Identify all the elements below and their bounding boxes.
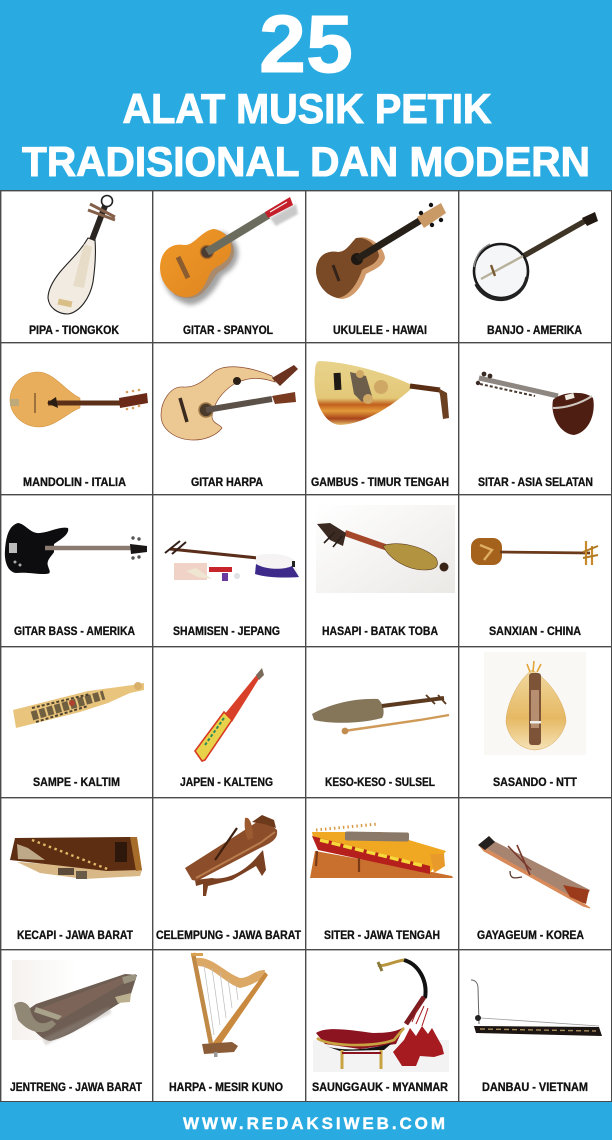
panel: kecapi bbox=[1, 798, 153, 950]
icon: sasando bbox=[484, 652, 586, 755]
panel: banjo bbox=[459, 191, 612, 343]
label: DANBAU - VIETNAM bbox=[482, 1082, 588, 1094]
label: HASAPI - BATAK TOBA bbox=[322, 626, 438, 638]
panel: danbau bbox=[459, 950, 612, 1102]
panel: pipa bbox=[1, 191, 153, 343]
label: MANDOLIN - ITALIA bbox=[23, 477, 126, 489]
panel: sampe bbox=[1, 647, 153, 798]
label: KESO-KESO - SULSEL bbox=[325, 777, 435, 789]
label: JENTRENG - JAWA BARAT bbox=[10, 1082, 142, 1094]
panel: hasapi bbox=[306, 495, 459, 647]
panel: japen bbox=[153, 647, 306, 798]
icon: banjo bbox=[474, 212, 598, 299]
panel: sitar bbox=[459, 343, 612, 495]
icon: japen bbox=[195, 668, 264, 761]
icon: harpa bbox=[191, 953, 268, 1057]
icon: hasapi bbox=[316, 505, 455, 593]
icon: siter bbox=[310, 824, 453, 878]
icon: gitar bbox=[160, 197, 298, 305]
panel: ukulele bbox=[306, 191, 459, 343]
label: BANJO - AMERIKA bbox=[487, 325, 582, 337]
icon: pipa bbox=[48, 196, 115, 314]
icon: gitar harpa bbox=[161, 365, 298, 440]
label: GAMBUS - TIMUR TENGAH bbox=[311, 477, 449, 489]
title line 1: ALAT MUSIK PETIK bbox=[122, 85, 492, 132]
icon: gitar bass bbox=[5, 523, 147, 574]
icon: gambus bbox=[314, 361, 449, 425]
label: SITER - JAWA TENGAH bbox=[324, 930, 440, 942]
label: PIPA - TIONGKOK bbox=[29, 325, 120, 337]
label: SANXIAN - CHINA bbox=[489, 626, 581, 638]
icon: gayageum bbox=[478, 836, 590, 908]
icon: ukulele bbox=[316, 203, 446, 299]
panel: harpa bbox=[153, 950, 306, 1102]
panel: mandolin bbox=[1, 343, 153, 495]
footer url: WWW.REDAKSIWEB.COM bbox=[183, 1114, 445, 1133]
label: KECAPI - JAWA BARAT bbox=[17, 930, 133, 942]
label: GITAR - SPANYOL bbox=[183, 325, 273, 337]
icon: mandolin bbox=[10, 372, 148, 427]
icon: danbau bbox=[471, 980, 602, 1036]
panel: gitar harpa bbox=[153, 343, 306, 495]
icon: sampe bbox=[13, 682, 144, 728]
panel: keso-keso bbox=[306, 647, 459, 798]
label: GAYAGEUM - KOREA bbox=[477, 930, 584, 942]
panel: celempung bbox=[153, 798, 306, 950]
panel: sanxian bbox=[459, 495, 612, 647]
panel: shamisen bbox=[153, 495, 306, 647]
title number: 25 bbox=[259, 0, 353, 90]
label: GITAR BASS - AMERIKA bbox=[14, 626, 135, 638]
footer banner bbox=[0, 1102, 612, 1140]
icon: saunggauk bbox=[313, 960, 449, 1072]
icon: jentreng bbox=[12, 960, 138, 1042]
panel: jentreng bbox=[1, 950, 153, 1102]
icon: sitar bbox=[476, 372, 594, 435]
panel: saunggauk bbox=[306, 950, 459, 1102]
panel: gayageum bbox=[459, 798, 612, 950]
label: SHAMISEN - JEPANG bbox=[173, 626, 280, 638]
panel: siter bbox=[306, 798, 459, 950]
icon: sanxian bbox=[471, 538, 598, 565]
label: UKULELE - HAWAI bbox=[333, 325, 427, 337]
label: CELEMPUNG - JAWA BARAT bbox=[156, 930, 301, 942]
label: JAPEN - KALTENG bbox=[180, 777, 273, 789]
icon: keso-keso bbox=[312, 695, 449, 734]
panel: gitar bbox=[153, 191, 306, 343]
label: SITAR - ASIA SELATAN bbox=[478, 477, 593, 489]
title line 2: TRADISIONAL DAN MODERN bbox=[22, 138, 590, 185]
panel: gitar bass bbox=[1, 495, 153, 647]
label: SASANDO - NTT bbox=[493, 777, 577, 789]
panel: sasando bbox=[459, 647, 612, 798]
label: GITAR HARPA bbox=[191, 477, 263, 489]
icon: kecapi bbox=[10, 837, 142, 879]
header banner bbox=[0, 0, 612, 190]
panel: gambus bbox=[306, 343, 459, 495]
label: HARPA - MESIR KUNO bbox=[169, 1082, 283, 1094]
icon: shamisen bbox=[165, 541, 299, 581]
label: SAMPE - KALTIM bbox=[33, 777, 120, 789]
icon: celempung bbox=[185, 815, 277, 896]
label: SAUNGGAUK - MYANMAR bbox=[312, 1082, 449, 1094]
